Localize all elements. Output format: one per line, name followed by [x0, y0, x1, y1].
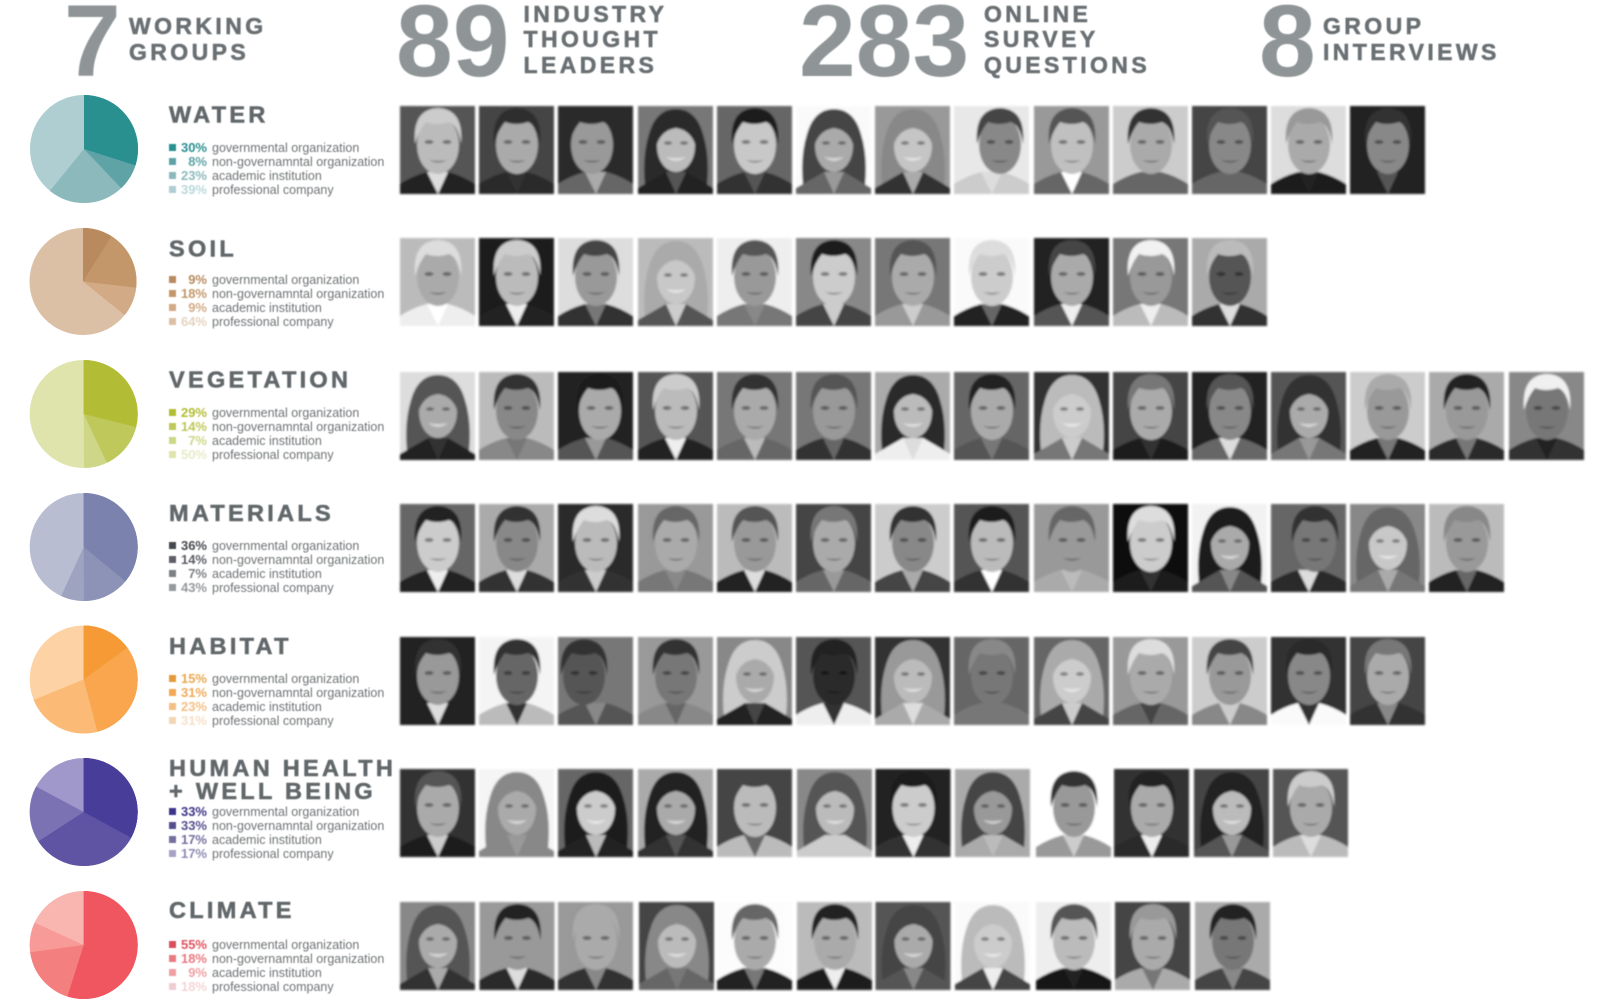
legend: human health and well being: 17% [181, 846, 207, 861]
legend: human health and well being: non-governamntal organization [212, 819, 384, 833]
legend: water: professional company [212, 183, 334, 197]
portrait row: vegetation [400, 372, 1584, 460]
heading: human health + well being: + WELL BEING [169, 778, 376, 804]
stat: 283 online survey questions: QUESTIONS [984, 52, 1150, 78]
legend: climate: 18% [181, 979, 207, 994]
legend: habitat: 23% [181, 699, 207, 714]
legend: human health and well being: 17% [181, 832, 207, 847]
legend: soil: 9% [188, 272, 207, 287]
pie chart: soil [56, 255, 110, 308]
heading: soil: SOIL [169, 236, 237, 262]
portrait row: habitat [400, 637, 1425, 725]
portrait row: water [400, 106, 1425, 194]
legend: habitat: professional company [212, 714, 334, 728]
stat: 7 working groups [64, 0, 267, 98]
portrait row: human health and well being [400, 769, 1348, 857]
legend: vegetation: non-governamntal organization [212, 420, 384, 434]
legend: materials: non-governamntal organization [212, 553, 384, 567]
legend: climate: governmental organization [212, 938, 359, 952]
heading: materials: MATERIALS [169, 500, 334, 526]
legend: materials [169, 538, 384, 595]
pie chart: water [57, 122, 111, 176]
heading: vegetation: VEGETATION [169, 366, 351, 392]
stat: 7 working groups: GROUPS [129, 39, 249, 65]
legend: vegetation: 7% [188, 433, 207, 448]
legend: climate: academic institution [212, 966, 322, 980]
legend: water: 8% [188, 154, 207, 169]
legend: habitat: non-governamntal organization [212, 686, 384, 700]
legend: water: 30% [181, 140, 207, 155]
heading: habitat: HABITAT [169, 633, 292, 659]
legend: water: governmental organization [212, 141, 359, 155]
heading: climate: CLIMATE [169, 897, 295, 923]
legend: habitat: academic institution [212, 700, 322, 714]
legend: soil: non-governamntal organization [212, 287, 384, 301]
stat: 7 working groups: WORKING [129, 13, 267, 39]
legend: habitat: 31% [181, 713, 207, 728]
heading: human health + well being [169, 755, 396, 804]
legend: vegetation [169, 405, 384, 462]
legend: human health and well being: governmental organization [212, 805, 359, 819]
legend: habitat: 31% [181, 685, 207, 700]
pie chart: vegetation [57, 387, 111, 441]
legend: human health and well being: academic institution [212, 833, 322, 847]
stat: 283 online survey questions: SURVEY [984, 26, 1099, 52]
legend: climate: 18% [181, 951, 207, 966]
portrait row: materials [400, 504, 1504, 592]
legend: water: non-governamntal organization [212, 155, 384, 169]
stat: 283 online survey questions [799, 0, 1150, 98]
legend: water: 39% [181, 182, 207, 197]
legend: soil: professional company [212, 315, 334, 329]
legend: water: 23% [181, 168, 207, 183]
legend: vegetation: professional company [212, 448, 334, 462]
legend: climate: professional company [212, 980, 334, 994]
stat: 8 group interviews: INTERVIEWS [1323, 39, 1500, 65]
legend: climate [169, 937, 384, 994]
portrait row: climate [400, 902, 1270, 990]
legend: materials: 43% [181, 580, 207, 595]
legend: materials: governmental organization [212, 539, 359, 553]
legend: soil: 18% [181, 286, 207, 301]
stat: 89 industry thought leaders: INDUSTRY [524, 1, 667, 27]
pie chart: materials [57, 520, 111, 574]
legend: climate: non-governamntal organization [212, 952, 384, 966]
stat: 283 online survey questions: ONLINE [984, 1, 1091, 27]
legend: vegetation: 14% [181, 419, 207, 434]
pie chart: climate [57, 918, 111, 972]
legend: climate: 55% [181, 937, 207, 952]
legend: materials: 7% [188, 566, 207, 581]
legend: vegetation: 29% [181, 405, 207, 420]
legend: materials: 14% [181, 552, 207, 567]
portrait row: soil [400, 238, 1267, 326]
legend: vegetation: 50% [181, 447, 207, 462]
stat: 89 industry thought leaders: THOUGHT [524, 26, 661, 52]
legend: habitat [169, 671, 384, 728]
legend: soil: academic institution [212, 301, 322, 315]
legend: materials: professional company [212, 581, 334, 595]
legend: vegetation: governmental organization [212, 406, 359, 420]
legend: human health and well being: 33% [181, 804, 207, 819]
legend: soil: 9% [188, 300, 207, 315]
legend: human health and well being: professional company [212, 847, 334, 861]
pie chart: habitat [57, 652, 111, 706]
legend: soil: 64% [181, 314, 207, 329]
legend: water [169, 140, 384, 197]
legend: soil [169, 272, 384, 329]
legend: vegetation: academic institution [212, 434, 322, 448]
legend: habitat: governmental organization [212, 672, 359, 686]
heading: human health + well being: HUMAN HEALTH [169, 755, 396, 781]
legend: water: academic institution [212, 169, 322, 183]
legend: human health and well being [169, 804, 384, 861]
legend: soil: governmental organization [212, 273, 359, 287]
pie chart: human health and well being [57, 785, 111, 839]
stat: 8 group interviews: GROUP [1323, 13, 1424, 39]
legend: materials: 36% [181, 538, 207, 553]
legend: habitat: 15% [181, 671, 207, 686]
heading: water: WATER [169, 102, 269, 128]
stat: 8 group interviews [1259, 0, 1500, 98]
legend: climate: 9% [188, 965, 207, 980]
stat: 89 industry thought leaders [396, 0, 667, 98]
stat: 89 industry thought leaders: LEADERS [524, 52, 657, 78]
legend: materials: academic institution [212, 567, 322, 581]
legend: human health and well being: 33% [181, 818, 207, 833]
